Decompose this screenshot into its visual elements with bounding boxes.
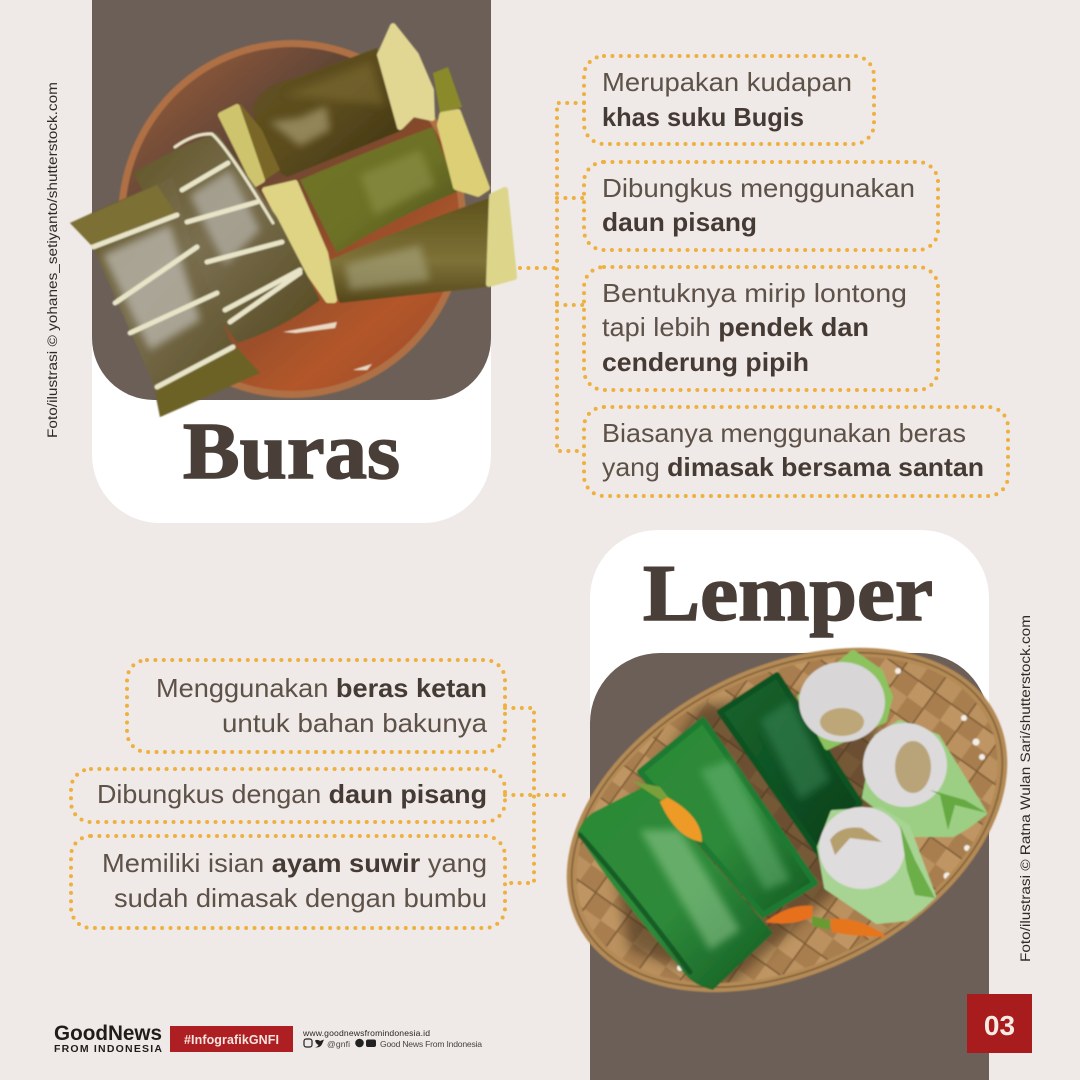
- callout: daun pisang: [584, 162, 938, 250]
- chilies: [660, 796, 702, 842]
- icon: instagram: [304, 1039, 312, 1047]
- callout: kudapan: Merupakan kudapan: [602, 67, 852, 97]
- rice slice 1: [800, 653, 890, 747]
- callout: bentuk: tapi lebih pendek dan: [602, 312, 869, 342]
- strings: [93, 163, 300, 387]
- icon: facebook: [355, 1039, 364, 1047]
- roll bottom: [330, 198, 490, 303]
- panel: Lemper: [566, 530, 1008, 1080]
- title: Buras: Buras: [183, 408, 400, 496]
- callout: kudapan: khas suku Bugis: [602, 102, 804, 132]
- connector: Lemper: [505, 708, 570, 883]
- callout: daun pisang: Dibungkus menggunakan: [602, 173, 915, 203]
- roll 2: [640, 720, 815, 915]
- logo: GoodNews from Indonesia: FROM INDONESIA: [54, 1043, 162, 1055]
- footer contacts: Good News From Indonesia: [380, 1039, 482, 1049]
- logo: GoodNews from Indonesia: GoodNews: [54, 1021, 162, 1045]
- illustration: buras on clay plate: [70, 26, 514, 417]
- callout: bentuk: Bentuknya mirip lontong: [602, 278, 907, 308]
- Lemper white card: [590, 530, 989, 1080]
- callout: bentuk: cenderung pipih: [602, 347, 809, 377]
- footer contacts: www.goodnewsfromindonesia.id: [302, 1028, 430, 1038]
- hashtag badge: #InfografikGNFI: [184, 1033, 279, 1047]
- roll 1: [577, 785, 773, 990]
- wrapped packet back: [133, 133, 320, 343]
- callout: santan: [584, 407, 1008, 496]
- rice slice 3: [820, 810, 933, 921]
- callout: beras ketan: untuk bahan bakunya: [222, 708, 488, 738]
- callout: santan: Biasanya menggunakan beras: [602, 418, 966, 448]
- logo: GoodNews from Indonesia: [54, 1021, 162, 1055]
- callout: santan: yang dimasak bersama santan: [602, 452, 984, 482]
- roll top: [253, 48, 403, 177]
- footer contacts: @gnfi: [327, 1039, 350, 1049]
- connector: Buras: [520, 103, 584, 451]
- callout: beras ketan: [127, 660, 505, 752]
- callout: bentuk: [584, 267, 938, 390]
- callout: ayam suwir: sudah dimasak dengan bumbu: [114, 883, 487, 913]
- credit: Lemper photo: Foto/ilustrasi © Ratna Wulan Sari/shutterstock.com: [1018, 615, 1033, 962]
- page number: [967, 994, 1032, 1053]
- callout: daun pisang: daun pisang: [602, 207, 757, 237]
- credit: Buras photo: Foto/ilustrasi © yohanes_setiyanto/shutterstock.com: [45, 82, 60, 438]
- roll middle: [433, 67, 462, 113]
- Buras white card: [92, 0, 491, 523]
- left cap: [265, 183, 334, 300]
- panel: Buras: [70, 0, 514, 523]
- wrapped packet front: [70, 177, 260, 417]
- roll 3: [720, 675, 860, 855]
- title: Lemper: Lemper: [643, 550, 933, 638]
- icon: youtube: [366, 1040, 376, 1047]
- small cap: [240, 103, 280, 182]
- Lemper brown backing: [590, 653, 989, 1080]
- callout: beras ketan: Menggunakan beras ketan: [156, 673, 487, 703]
- callout: dibungkus: [71, 769, 505, 822]
- footer contacts: [302, 1028, 482, 1049]
- callout: ayam suwir: Memiliki isian ayam suwir yang: [102, 848, 487, 878]
- illustration: lemper in bamboo basket: [566, 646, 1008, 993]
- rice slice 2: [865, 723, 984, 834]
- icon: twitter: [315, 1040, 324, 1048]
- hashtag badge: [170, 1026, 293, 1052]
- callout: ayam suwir: [71, 836, 505, 928]
- page number: 03: [984, 1010, 1015, 1041]
- Buras brown backing: [92, 0, 491, 400]
- callout: kudapan: [584, 56, 874, 144]
- callout: dibungkus: Dibungkus dengan daun pisang: [97, 779, 487, 809]
